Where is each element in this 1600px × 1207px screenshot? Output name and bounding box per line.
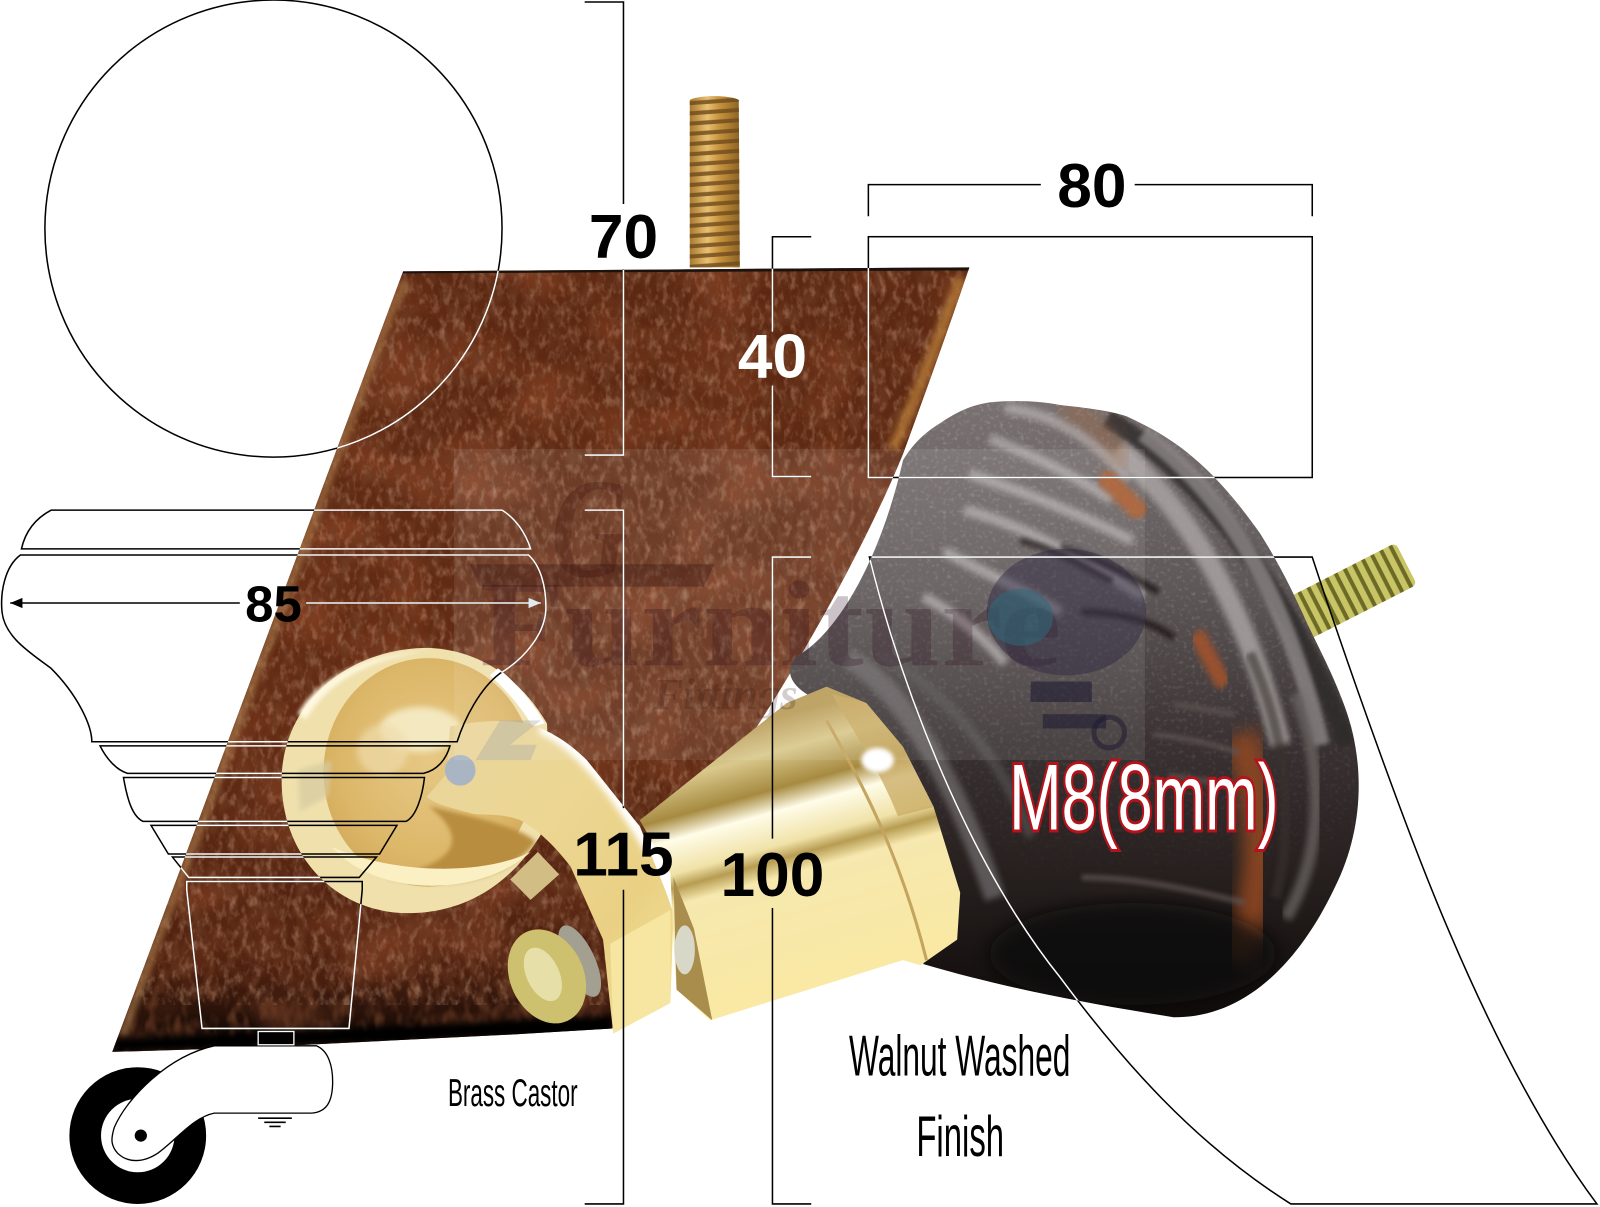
fixing symbol xyxy=(258,1118,292,1126)
turned leg outline xyxy=(21,510,531,549)
bracket 70 lines xyxy=(585,2,623,455)
watermark logo: G xyxy=(551,449,628,607)
castor diagram xyxy=(69,1032,333,1204)
watermark logo: Fittings xyxy=(652,669,798,719)
right threaded bolt xyxy=(1285,543,1417,641)
bracket 115 lines xyxy=(585,510,623,1204)
85 width arrow lines xyxy=(10,602,541,604)
wooden wedge leg xyxy=(102,260,980,1061)
bracket 40 lines xyxy=(772,237,811,476)
linework inverted to white over dark wood and knob xyxy=(180,268,1275,1030)
walnut washed knob xyxy=(786,393,1367,1025)
85 arrowheads xyxy=(10,598,541,608)
label M8 thread size: M8(8mm) xyxy=(1009,744,1279,849)
watermark logo: Furniture xyxy=(480,557,1061,692)
watermark bulb icon xyxy=(987,549,1146,748)
brass castor wheel xyxy=(282,648,551,913)
bracket 80 lines xyxy=(868,185,1312,216)
side screw xyxy=(493,917,610,1036)
top threaded bolt xyxy=(690,96,740,267)
brass castor arm xyxy=(427,721,673,1034)
castor wheel tyre xyxy=(69,1067,206,1204)
bracket 100 lines xyxy=(772,557,811,1204)
watermark logo xyxy=(454,449,1146,760)
label 70: 70 xyxy=(589,203,658,272)
watermark swash on arm xyxy=(476,720,541,760)
castor bracket xyxy=(112,1046,333,1161)
label 100: 100 xyxy=(721,841,824,910)
mounting plate xyxy=(258,1032,294,1045)
swept leg outline xyxy=(869,557,1597,1204)
brass cone ferrule xyxy=(640,687,960,1020)
label 80: 80 xyxy=(1057,152,1126,221)
label brass castor: Brass Castor xyxy=(448,1072,578,1115)
label 115: 115 xyxy=(573,820,674,889)
sphere outline top view xyxy=(45,0,502,457)
label walnut washed: Walnut Washed xyxy=(849,1024,1070,1088)
label finish: Finish xyxy=(916,1105,1004,1169)
label 40: 40 xyxy=(738,323,807,392)
label 85: 85 xyxy=(245,575,302,632)
rectangle profile xyxy=(868,237,1312,477)
